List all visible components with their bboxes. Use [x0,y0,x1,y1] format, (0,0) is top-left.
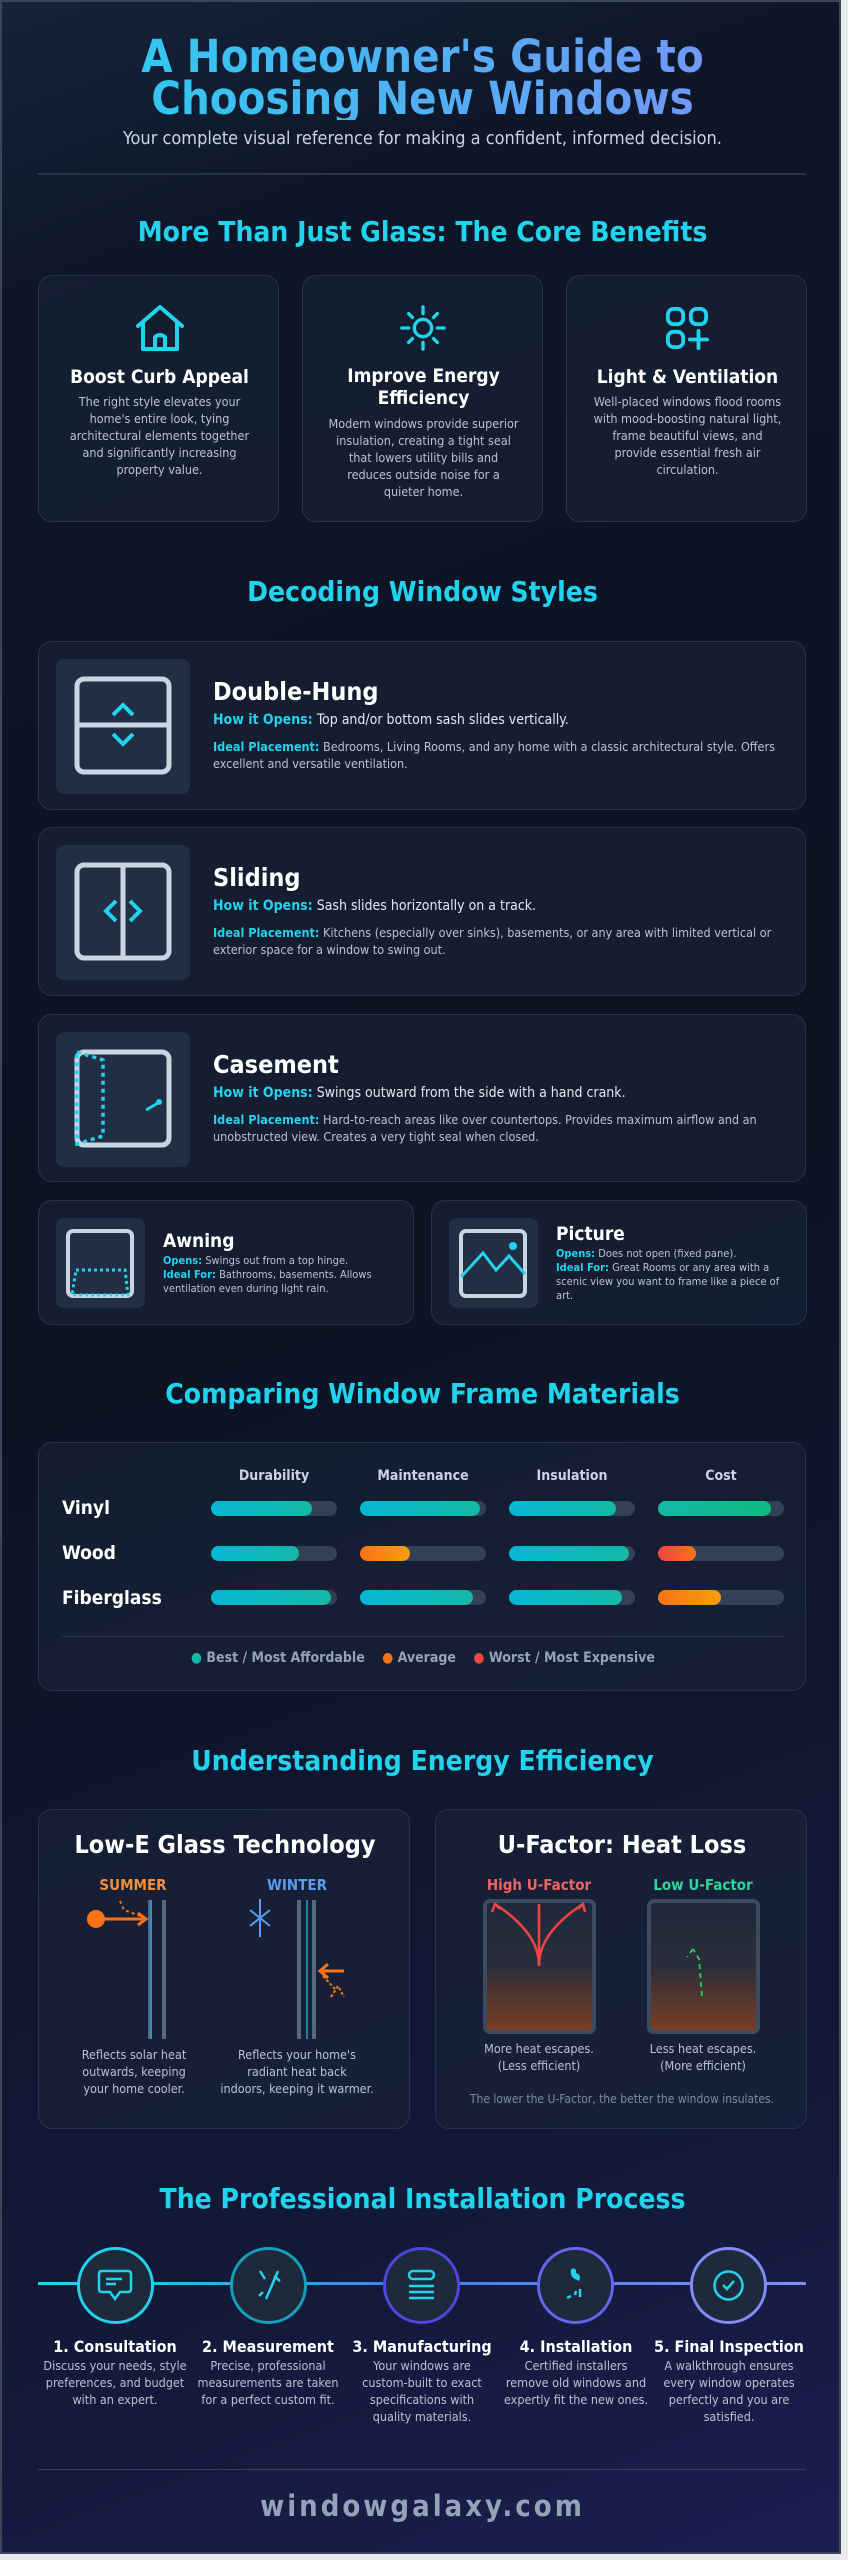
timeline [38,2247,806,2424]
panel: awning: Awning [163,1230,234,1252]
icon: consultation [77,2247,154,2324]
panel: u-factor: The lower the U-Factor, the better the window insulates. [470,2092,774,2106]
panel: u-factor: Less heat escapes. [650,2041,756,2056]
panel: materials comparison chart: Durability [239,1468,309,1484]
panel: sliding: Ideal Placement: Kitchens (especially over sinks), basements, or any area with limited vertical or exterior space for a window to swing out. [213,925,771,957]
icon: picture window [449,1218,538,1308]
panel: sliding [38,827,806,996]
footer brand: windowgalaxy.com [260,2489,585,2523]
step 2: 2. Measurement [202,2337,334,2356]
panel: sliding: Sliding [213,863,301,892]
icon: installation [537,2247,614,2324]
panel: light ventilation: Well-placed windows flood rooms with mood-boosting natural light, frame beautiful views, and provide essential fresh air circulation. [594,394,781,477]
panel: energy efficiency: Efficiency [378,387,469,409]
heading: window styles: Decoding Window Styles [247,575,598,608]
icon: grid [666,307,709,350]
panel: low-e glass: radiant heat back [247,2064,347,2079]
subtitle: Your complete visual reference for making a confident, informed decision. [123,128,722,149]
panel: awning [38,1200,414,1325]
panel: awning: Ideal For: Bathrooms, basements. Allows ventilation even during light rain. [163,1268,372,1295]
panel: casement [38,1014,806,1182]
step 1: Discuss your needs, style preferences, and budget with an expert. [43,2358,187,2407]
title [2,36,843,120]
panel: curb appeal: The right style elevates your home's entire look, tying architectural elements together and significantly increasing property value. [70,394,249,477]
title: Choosing New Windows [151,72,694,125]
panel: light ventilation: Light & Ventilation [597,366,778,388]
panel: energy efficiency: Modern windows provide superior insulation, creating a tight seal that lowers utility bills and reduces outside noise for a quieter home. [329,416,518,499]
panel: u-factor: High U-Factor [487,1876,591,1894]
step 3 [352,2337,492,2424]
heading: energy: Understanding Energy Efficiency [191,1744,654,1777]
step 2: Precise, professional measurements are taken for a perfect custom fit. [197,2358,338,2407]
step 5: A walkthrough ensures every window operates perfectly and you are satisfied. [663,2358,795,2424]
panel: casement: How it Opens: Swings outward from the side with a hand crank. [213,1085,626,1101]
panel: picture: Picture [556,1223,625,1245]
panel: materials comparison chart: Insulation [537,1468,607,1484]
panel: materials comparison chart: Fiberglass [62,1587,162,1609]
step 3: 3. Manufacturing [352,2337,492,2356]
diagram: summer/winter glass [87,1899,345,2039]
step 1: 1. Consultation [53,2337,177,2356]
panel: energy efficiency [302,275,543,522]
heading: installation process: The Professional Installation Process [160,2182,685,2215]
panel: curb appeal [38,275,279,522]
panel: materials comparison chart: Cost [705,1468,737,1484]
icon: awning window [56,1218,145,1308]
panel: materials comparison chart: Wood [62,1542,116,1564]
icon: inspection [690,2247,767,2324]
panel: materials comparison chart [38,1442,806,1691]
panel: u-factor: (More efficient) [660,2058,746,2073]
icon: casement window [56,1032,190,1167]
panel: low-e glass: Reflects solar heat outwards, keeping your home cooler. [82,2047,186,2096]
panel: low-e glass: indoors, keeping it warmer. [220,2081,374,2096]
panel: materials comparison chart: Vinyl [62,1497,110,1519]
panel: double-hung [38,641,806,810]
icon: measurement [230,2247,307,2324]
panel: casement: Casement [213,1050,339,1079]
panel: u-factor: Low U-Factor [653,1876,753,1894]
icon: sliding window [56,845,190,980]
panel: u-factor [435,1809,807,2129]
panel: u-factor: (Less efficient) [498,2058,580,2073]
panel: picture: Ideal For: Great Rooms or any area with a scenic view you want to frame like a piece of art. [556,1261,779,1302]
legend: ● Best / Most Affordable ● Average ● Worst / Most Expensive [191,1650,655,1666]
icon: double-hung window [56,659,190,794]
panel: double-hung: Double-Hung [213,677,379,706]
panel: curb appeal: Boost Curb Appeal [70,366,249,388]
panel: double-hung: Ideal Placement: Bedrooms, Living Rooms, and any home with a classic architectural style. Offers excellent and versatile ventilation. [213,739,775,771]
icon: sun [400,305,446,351]
panel: energy efficiency: Improve Energy [347,365,500,387]
panel: awning: Opens: Swings out from a top hinge. [163,1254,348,1267]
step 5 [654,2337,804,2424]
panel: double-hung: How it Opens: Top and/or bottom sash slides vertically. [213,712,569,728]
panel: low-e glass: SUMMER [99,1876,167,1894]
step 3: Your windows are custom-built to exact specifications with quality materials. [362,2358,482,2424]
panel: low-e glass [38,1809,410,2129]
panel: u-factor: More heat escapes. [484,2041,594,2056]
panel: picture [431,1200,807,1325]
title: A Homeowner's Guide to [141,30,704,83]
panel: picture: Opens: Does not open (fixed pane). [556,1247,736,1260]
icon: house [136,304,184,351]
panel: materials comparison chart: Maintenance [377,1468,469,1484]
panel: casement: Ideal Placement: Hard-to-reach areas like over countertops. Provides maximum airflow and an unobstructed view. Creates a very tight seal when closed. [213,1112,757,1144]
panel: sliding: How it Opens: Sash slides horizontally on a track. [213,898,536,914]
step 4: Certified installers remove old windows and expertly fit the new ones. [504,2358,648,2407]
heading: core benefits: More Than Just Glass: The Core Benefits [138,215,707,248]
panel: u-factor: U-Factor: Heat Loss [498,1830,746,1859]
panel: low-e glass: Low-E Glass Technology [74,1830,376,1859]
step 4: 4. Installation [520,2337,632,2356]
panel: low-e glass: WINTER [267,1876,327,1894]
icon: manufacturing [383,2247,460,2324]
step 5: 5. Final Inspection [654,2337,804,2356]
panel: low-e glass: Reflects your home's [238,2047,356,2062]
heading: materials: Comparing Window Frame Materials [165,1377,680,1410]
panel: light ventilation [566,275,807,522]
diagram: u-factor windows [483,1899,760,2034]
